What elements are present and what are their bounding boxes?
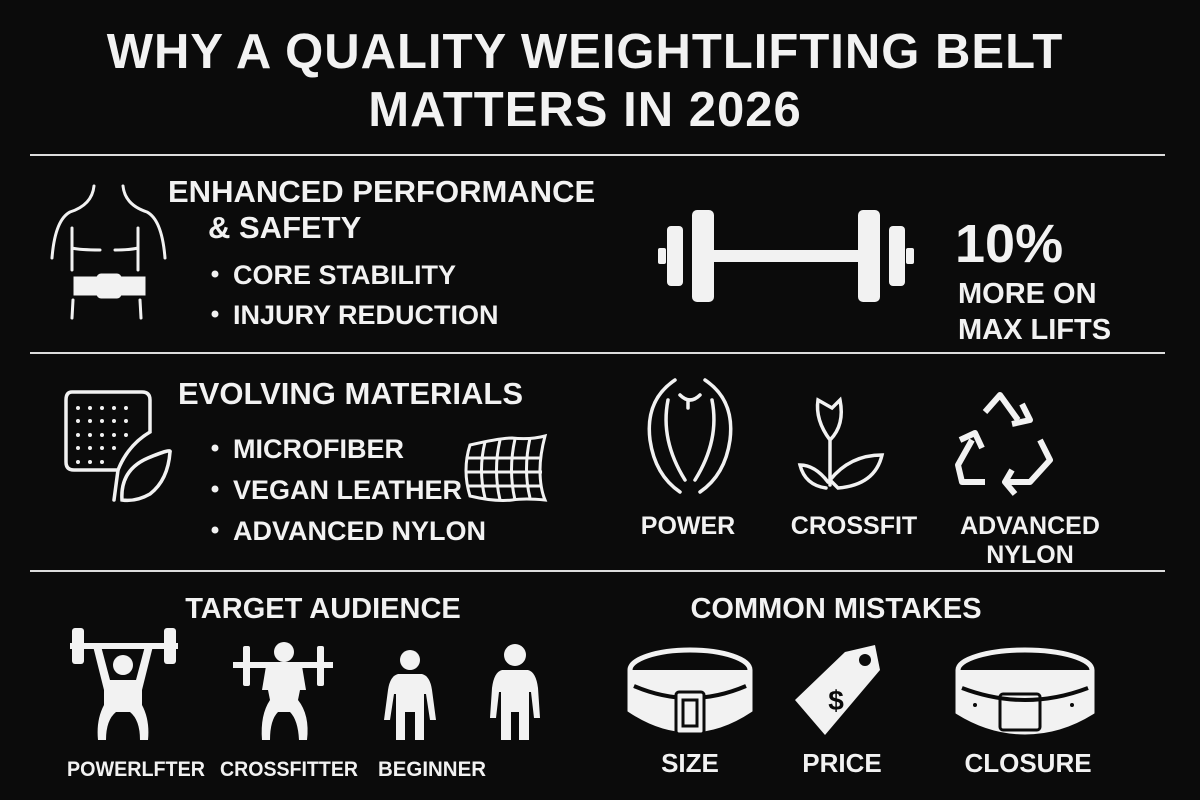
title: MATTERS IN 2026 bbox=[368, 83, 802, 137]
title: WHY A QUALITY WEIGHTLIFTING BELT bbox=[107, 25, 1063, 79]
icon: torso with belt bbox=[52, 186, 165, 318]
panel: materials text: EVOLVING MATERIALS bbox=[178, 376, 523, 411]
icon: mesh bbox=[466, 436, 545, 500]
icon: belt closure bbox=[958, 650, 1092, 732]
mistake labels: PRICE bbox=[802, 748, 882, 778]
mistake labels: SIZE bbox=[661, 748, 719, 778]
icon: person bbox=[490, 644, 540, 740]
icon: price tag: $ bbox=[828, 685, 844, 716]
heading: target audience: TARGET AUDIENCE bbox=[185, 593, 461, 625]
audience labels: CROSSFITTER bbox=[220, 758, 358, 781]
icon: price tag bbox=[795, 645, 880, 735]
icon: belt size bbox=[630, 650, 750, 734]
icon: power belt bbox=[649, 380, 731, 492]
title bbox=[107, 25, 1063, 137]
icon: fabric with leaf bbox=[66, 392, 170, 500]
panel: materials text: ADVANCED NYLON bbox=[233, 516, 486, 546]
stat: 10%: 10% bbox=[955, 214, 1063, 274]
label: advanced nylon: ADVANCED bbox=[960, 512, 1100, 540]
icon: sprout bbox=[800, 400, 882, 488]
label: advanced nylon: NYLON bbox=[986, 541, 1074, 569]
icon: crossfitter bbox=[233, 642, 333, 740]
panel: materials text: VEGAN LEATHER bbox=[233, 475, 462, 505]
text: CROSSFIT bbox=[791, 512, 917, 540]
stat: 10% bbox=[955, 214, 1111, 346]
icon: barbell bbox=[658, 210, 914, 302]
panel: materials text: MICROFIBER bbox=[233, 434, 404, 464]
panel: materials text bbox=[178, 376, 523, 546]
icon: powerlifter bbox=[70, 628, 178, 740]
panel: performance text: & SAFETY bbox=[208, 210, 362, 245]
stat: 10%: MAX LIFTS bbox=[958, 314, 1111, 346]
audience labels bbox=[67, 758, 486, 781]
label: advanced nylon bbox=[960, 512, 1100, 569]
mistake labels: CLOSURE bbox=[964, 748, 1092, 778]
audience labels: BEGINNER bbox=[378, 758, 486, 781]
panel: performance text bbox=[168, 174, 595, 330]
icon: beginner bbox=[384, 650, 436, 740]
stat: 10%: MORE ON bbox=[958, 278, 1097, 310]
text: POWER bbox=[641, 512, 735, 540]
icon: recycle bbox=[958, 395, 1050, 494]
panel: performance text: ENHANCED PERFORMANCE bbox=[168, 174, 595, 209]
heading: common mistakes: COMMON MISTAKES bbox=[690, 593, 982, 625]
audience labels: POWERLFTER bbox=[67, 758, 205, 781]
panel: performance text: CORE STABILITY bbox=[233, 260, 456, 290]
panel: performance text: INJURY REDUCTION bbox=[233, 300, 499, 330]
mistake labels bbox=[661, 748, 1092, 778]
